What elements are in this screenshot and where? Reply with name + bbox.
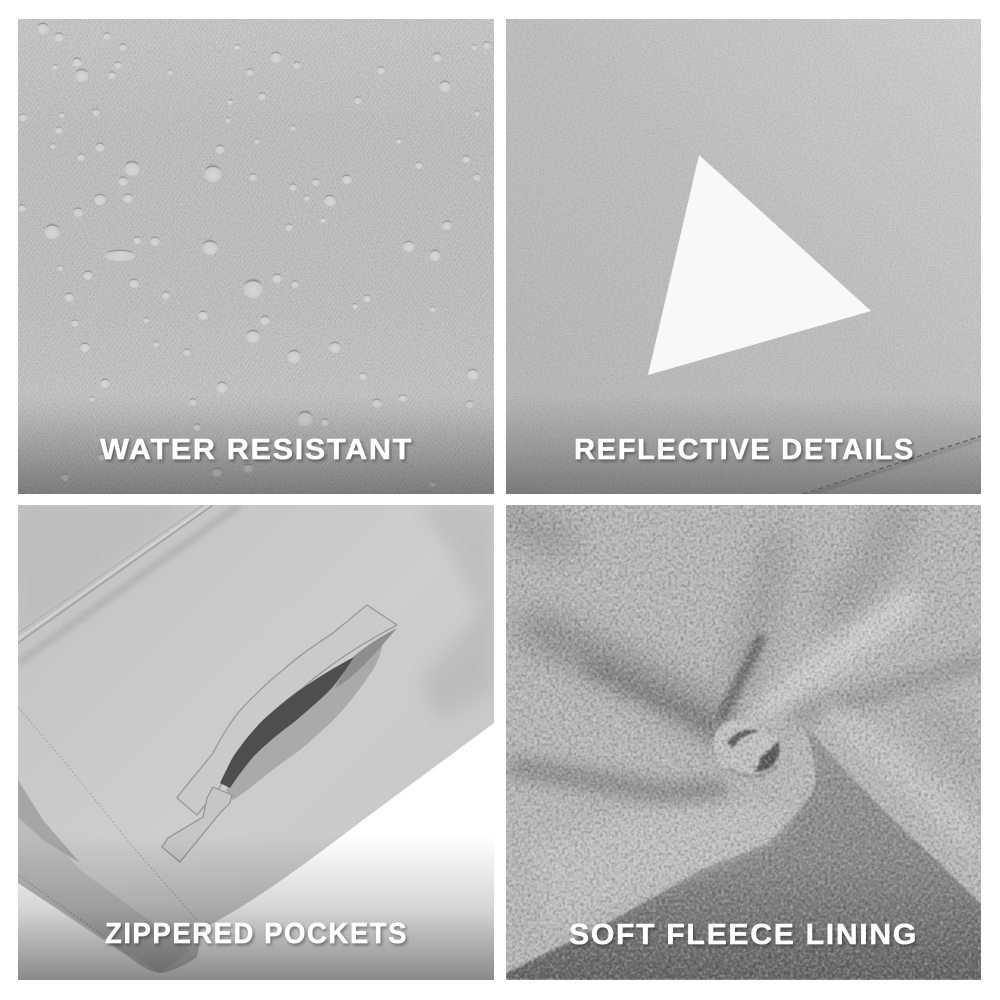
bottom shade (506, 410, 981, 494)
reflective triangle (648, 155, 871, 375)
fold highlights (530, 585, 981, 930)
fabric background (18, 19, 494, 494)
fleece base (506, 505, 981, 980)
heading: zippered pockets: ZIPPERED POCKETS (105, 918, 408, 950)
fold shadows (510, 510, 981, 793)
fleece lining at hem (18, 780, 80, 863)
panel: zippered pockets (18, 505, 494, 980)
hem seam stitches (18, 707, 197, 955)
stitched seam (803, 436, 981, 497)
white backdrop (18, 505, 494, 980)
heading: water resistant: WATER RESISTANT (100, 434, 413, 466)
pocket mesh interior (226, 628, 397, 800)
fabric background (506, 19, 981, 494)
zipper pull tab (162, 787, 232, 862)
jacket soft shading (18, 505, 494, 973)
water droplets (18, 22, 491, 487)
dark opening (220, 657, 354, 788)
bottom shade (18, 850, 494, 980)
bottom shade (18, 410, 494, 494)
zipper pocket (162, 605, 397, 862)
heading: reflective details: REFLECTIVE DETAILS (574, 434, 915, 466)
fleece texture (506, 505, 981, 980)
jacket body (18, 505, 494, 973)
panel: soft fleece lining (506, 505, 982, 980)
swirl centre (712, 719, 816, 782)
panel: water resistant (18, 19, 494, 494)
panel: reflective details (506, 19, 981, 497)
heading: soft fleece lining: SOFT FLEECE LINING (569, 919, 918, 951)
inner lining (335, 628, 397, 688)
pocket welt (177, 605, 397, 815)
lower dark fold (506, 723, 982, 980)
zipper placket (18, 505, 240, 663)
